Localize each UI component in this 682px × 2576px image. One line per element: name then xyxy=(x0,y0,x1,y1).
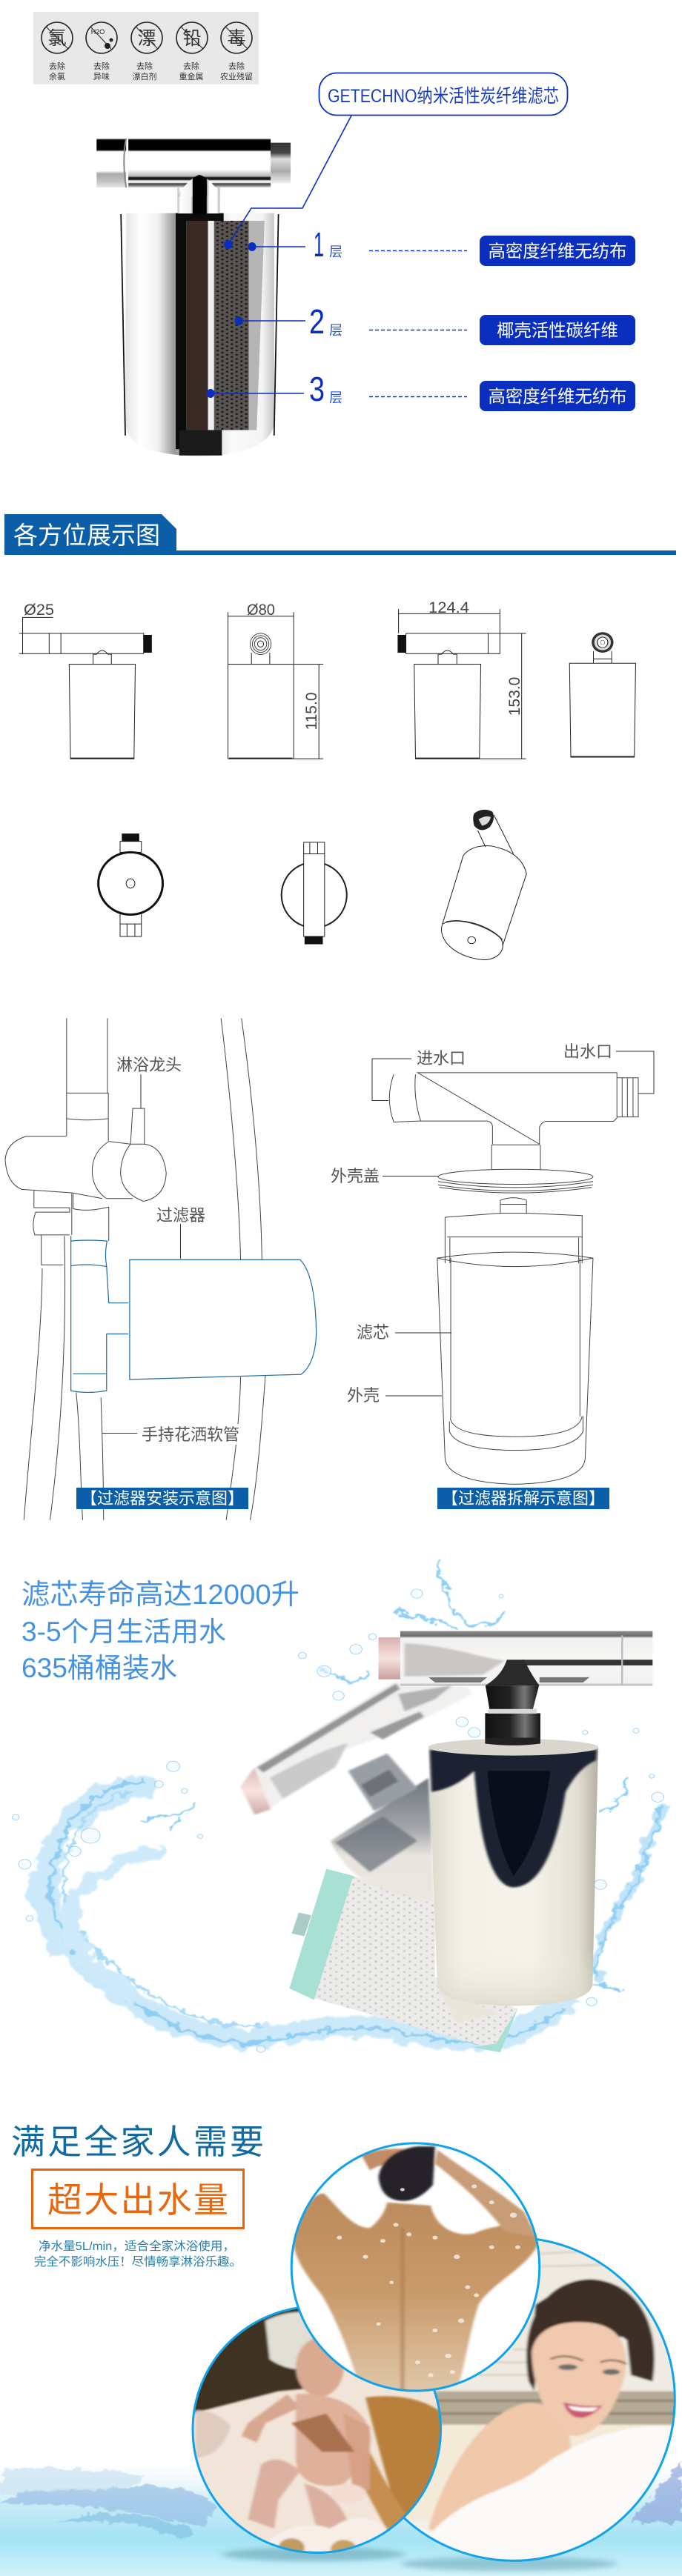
layer 2 tag xyxy=(369,315,635,345)
drawing: rear view xyxy=(569,632,635,757)
layer 3 tag xyxy=(369,381,635,411)
layer 2 label: 层 xyxy=(329,323,342,338)
description: 完全不影响水压！尽情畅享淋浴乐趣。 xyxy=(34,2255,242,2269)
label: hose xyxy=(102,1424,242,1445)
label: shell: 外壳 xyxy=(347,1386,380,1405)
icon: bleach xyxy=(131,22,162,53)
drawing: side view right with dimensions: 124.4 xyxy=(428,599,469,616)
product: tilted ghost body xyxy=(240,1682,472,1904)
icon: odor: H2O xyxy=(91,28,105,36)
icon labels: 去除 xyxy=(93,61,110,71)
icon: poison: 毒 xyxy=(227,28,246,49)
description xyxy=(34,2240,242,2269)
icon labels: 余氯 xyxy=(49,71,65,81)
panel: removal icons xyxy=(33,12,259,84)
drawing: side view left: Ø25 xyxy=(24,602,54,619)
icon labels: 漂白剂 xyxy=(132,71,157,81)
label: filter xyxy=(156,1206,205,1259)
heading: whole family: 满足全家人需要 xyxy=(11,2123,264,2161)
layer 1 tag: 高密度纤维无纺布 xyxy=(488,242,627,261)
icon: lead: 铅 xyxy=(182,28,202,49)
label: filter core: 滤芯 xyxy=(357,1323,389,1342)
layer 2 label xyxy=(309,302,342,341)
label: shower faucet xyxy=(116,1056,182,1108)
icon labels xyxy=(49,61,253,81)
label: outlet: 出水口 xyxy=(563,1042,612,1061)
icon: odor xyxy=(86,22,117,53)
label: inlet: 进水口 xyxy=(417,1049,466,1068)
drawing: perspective view xyxy=(442,810,526,960)
drawing: side view left xyxy=(19,602,152,759)
layer 3 label xyxy=(309,370,342,408)
label: filter core xyxy=(357,1323,451,1342)
layer 1 label: 1 xyxy=(314,225,324,264)
diagram: exploded filter xyxy=(389,1073,638,1484)
photo circle: man showering xyxy=(291,2143,540,2393)
label: inlet xyxy=(372,1049,466,1101)
layer 3 label: 层 xyxy=(329,390,342,405)
photo circle: woman in bath xyxy=(403,2238,676,2562)
product: chrome filter xyxy=(379,1631,652,2006)
label: outlet xyxy=(563,1042,654,1094)
layer 3 label: 3 xyxy=(309,370,325,408)
icon labels: 重金属 xyxy=(179,71,203,81)
drawing: front view with dimensions: 115.0 xyxy=(303,692,320,730)
label: shell cap: 外壳盖 xyxy=(331,1167,380,1185)
icon: chlorine xyxy=(42,22,73,53)
drawing: side view right with dimensions xyxy=(397,599,526,759)
section heading xyxy=(4,514,676,555)
label: filter: 过滤器 xyxy=(156,1206,205,1225)
icon: poison xyxy=(221,22,252,53)
drawing: side view right with dimensions: 153.0 xyxy=(506,677,523,716)
layer 1 tag xyxy=(369,236,635,266)
icon: chlorine: 氯 xyxy=(47,28,67,49)
drawing: front view with dimensions: Ø80 xyxy=(247,602,275,619)
caption: installation: 【过滤器安装示意图】 xyxy=(81,1489,244,1508)
icon: lead xyxy=(176,22,208,53)
product: tilted filter cartridge xyxy=(289,1868,517,2052)
icon labels: 农业残留 xyxy=(220,71,253,81)
leader to callout xyxy=(228,116,351,244)
caption: disassembly: 【过滤器拆解示意图】 xyxy=(442,1489,605,1508)
drawing: bottom view xyxy=(99,833,163,936)
feature text: 635桶桶装水 xyxy=(21,1653,177,1683)
layer 3 tag: 高密度纤维无纺布 xyxy=(488,387,627,406)
icon labels: 去除 xyxy=(49,61,65,71)
badge: large flow: 超大出水量 xyxy=(47,2180,228,2220)
label: shell xyxy=(347,1386,442,1405)
product cutaway xyxy=(96,139,291,456)
callout: filter core xyxy=(319,73,568,116)
icon labels: 异味 xyxy=(93,72,110,81)
icon labels: 去除 xyxy=(183,61,199,71)
layer 2 label: 2 xyxy=(309,302,325,341)
label: shower faucet: 淋浴龙头 xyxy=(116,1056,182,1074)
icon: bleach: 漂 xyxy=(137,28,156,49)
drawing: front view with dimensions xyxy=(228,602,323,759)
layer 1 label: 层 xyxy=(329,244,342,259)
badge: large flow xyxy=(33,2169,243,2229)
label: hose: 手持花洒软管 xyxy=(142,1425,239,1444)
diagram: shower installation xyxy=(5,1018,317,1520)
icon labels: 去除 xyxy=(228,61,245,71)
feature text: 滤芯寿命高达12000升 xyxy=(21,1580,299,1611)
section heading: 各方位展示图 xyxy=(13,522,160,549)
icon labels: 去除 xyxy=(136,61,153,71)
callout: filter core: GETECHNO纳米活性炭纤维滤芯 xyxy=(328,86,559,107)
layer markers xyxy=(206,240,305,398)
description: 净水量5L/min，适合全家沐浴使用， xyxy=(39,2240,235,2253)
water splash xyxy=(12,1561,664,2052)
water background xyxy=(0,2458,682,2576)
feature text xyxy=(21,1580,299,1683)
photo circle: baby bath xyxy=(191,2305,444,2559)
layer 2 tag: 椰壳活性碳纤维 xyxy=(497,321,618,340)
drawing: top view xyxy=(282,842,347,945)
feature text: 3-5个月生活用水 xyxy=(21,1617,226,1647)
layer 1 label xyxy=(314,225,342,264)
